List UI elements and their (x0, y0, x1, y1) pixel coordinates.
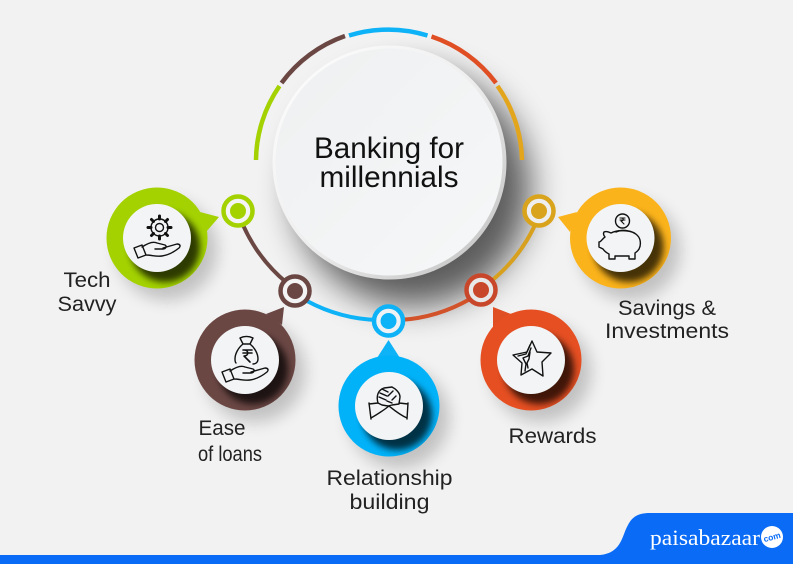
label: ease of loans: Ease (198, 417, 246, 440)
title: Banking for (314, 132, 464, 165)
label: savings and investments: Savings & (618, 297, 716, 320)
logo badge: com (762, 530, 782, 544)
bubble: savings and investments (558, 188, 680, 300)
label: tech savvy: Savvy (58, 293, 117, 316)
label: relationship building: building (350, 491, 430, 514)
icon: hand with gear (134, 216, 180, 258)
title line 2: millennials (320, 161, 458, 194)
label: tech savvy: Tech (64, 269, 110, 292)
node: tech savvy (224, 196, 252, 226)
label: savings and investments: Investments (605, 320, 729, 343)
bubble: relationship building (338, 340, 449, 468)
label: ease of loans: of loans (198, 443, 262, 466)
central circle shadow (294, 70, 530, 306)
central circle (272, 46, 506, 280)
logo wordmark: paisabazaar (650, 525, 761, 550)
node: rewards (466, 276, 496, 304)
node: ease of loans (280, 276, 310, 306)
lower connecting arc (243, 225, 535, 320)
icon: hand with rupee bag (222, 336, 268, 382)
node: savings (524, 196, 554, 226)
icon: handshake (369, 387, 408, 419)
bubble: ease of loans (194, 307, 305, 422)
icon: piggy bank with rupee coin (599, 214, 640, 259)
icon: star (513, 341, 551, 376)
logo badge (761, 526, 783, 548)
node: relationship (374, 306, 403, 336)
outer segmented arc (256, 30, 522, 160)
bubble: tech savvy (106, 188, 219, 300)
bubble: rewards (480, 307, 591, 422)
label: rewards: Rewards (508, 425, 596, 448)
footer logo band (0, 513, 793, 564)
label: relationship building: Relationship (326, 467, 452, 490)
